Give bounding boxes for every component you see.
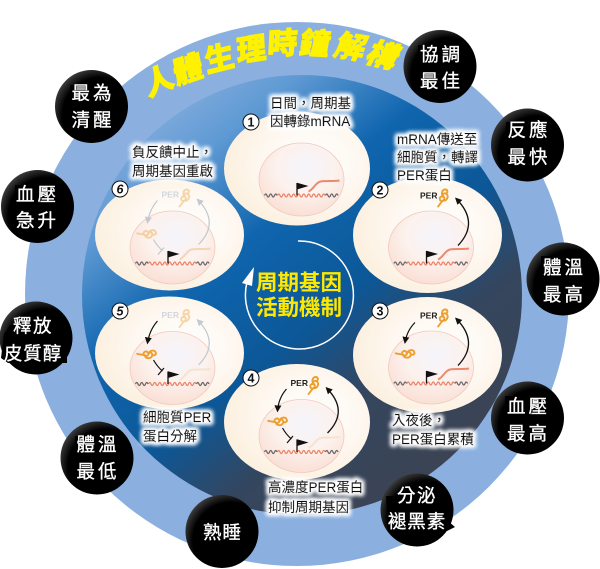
bubble: 最為清醒: 清醒 [71, 110, 115, 130]
inhibition bar [282, 428, 293, 443]
bubble: 血壓最高: 血壓 [507, 396, 550, 417]
title: 體 [169, 41, 206, 94]
faded import arrow [148, 200, 158, 222]
nuclear PER protein [268, 413, 288, 429]
cell 3: accumulation [353, 297, 502, 413]
badge 1 [243, 114, 259, 130]
faded PER label: PER [162, 310, 179, 320]
center heading: 活動機制 [256, 291, 342, 322]
cell 2: translation [353, 177, 502, 293]
caption 2: PER蛋白 [397, 168, 452, 183]
bubble: 體溫最低: 最低 [76, 461, 120, 482]
export arrow [326, 388, 338, 433]
bubble: 血壓急升: 血壓 [16, 184, 59, 205]
export arrow [456, 318, 469, 366]
badge 4: 4 [248, 372, 255, 386]
badge 5 [112, 303, 128, 319]
caption 2: mRNA傳送至 [397, 132, 477, 147]
bubble: 血壓最高: 最高 [507, 423, 550, 444]
faded export arrow [198, 200, 209, 244]
PER label: PER [290, 378, 308, 388]
bubble: 最為清醒: 最為 [71, 82, 115, 104]
bubble: 釋放皮質醇: 釋放 [13, 316, 53, 336]
badge 1: 1 [248, 116, 255, 130]
bubble: 體溫最低: 體溫 [76, 434, 120, 455]
caption 5: 細胞質PER [143, 410, 212, 425]
caption 6: 負反饋中止， [132, 145, 213, 160]
bubble: 分泌褪黑素 [380, 474, 455, 546]
bubble: 熟睡 [186, 495, 258, 568]
badge 4 [243, 370, 259, 386]
PER protein [438, 190, 448, 206]
center cycle arrow [242, 241, 353, 349]
badge 6 [112, 181, 128, 197]
PER label: PER [420, 190, 437, 200]
title: 解 [329, 22, 374, 68]
bubble: 反應最快: 最快 [507, 146, 551, 168]
badge 3: 3 [377, 304, 384, 318]
caption 1 [270, 95, 351, 129]
caption 6: 周期基因重啟 [132, 163, 213, 179]
badge 2: 2 [377, 184, 384, 198]
caption 1: 日間，周期基 [270, 95, 351, 111]
bubble: 最為清醒 [55, 70, 128, 143]
caption 2 [397, 132, 478, 183]
caption 3 [392, 413, 474, 447]
bubble: 分泌褪黑素: 分泌 [397, 485, 437, 506]
title: 時 [267, 18, 299, 64]
title: 鐘 [296, 19, 335, 64]
inhibition bar [154, 360, 164, 375]
caption 4: 高濃度PER蛋白 [268, 479, 363, 495]
badge 2 [372, 182, 388, 198]
caption 3: 入夜後， [392, 413, 446, 428]
cell 1: transcription [224, 112, 370, 226]
badge 5: 5 [117, 304, 125, 318]
bubble: 協調最佳 [404, 30, 476, 103]
faded nuclear PER protein [137, 225, 157, 242]
caption 1: 因轉錄mRNA [270, 114, 350, 129]
bubble: 血壓急升: 急升 [16, 210, 59, 231]
faded PER protein [180, 310, 189, 327]
mRNA strand [308, 180, 340, 192]
bubble: 反應最快 [491, 108, 564, 182]
bubble: 血壓急升 [1, 170, 74, 243]
caption 2: 細胞質，轉譯 [397, 150, 478, 165]
nuclear PER protein [137, 346, 157, 362]
title [140, 18, 410, 106]
bubble: 血壓最高 [491, 382, 564, 454]
bubble: 釋放皮質醇 [0, 302, 72, 374]
center heading: 周期基因 [256, 266, 342, 297]
import arrow [148, 321, 158, 343]
caption 4 [268, 479, 363, 515]
bubble: 體溫最高 [526, 242, 600, 316]
PER protein [438, 310, 448, 326]
caption 3: PER蛋白累積 [392, 432, 474, 447]
faded PER label: PER [162, 190, 179, 200]
bubble: 熟睡: 熟睡 [203, 522, 242, 543]
center heading [256, 266, 342, 322]
faded inhibition bar [154, 240, 164, 254]
cell 5: degradation [95, 296, 244, 410]
badge 3 [372, 303, 388, 319]
export arrow [456, 198, 469, 246]
PER label: PER [420, 310, 437, 320]
bubble: 體溫最高: 最高 [543, 284, 586, 305]
PER protein [308, 377, 318, 394]
bubble: 分泌褪黑素: 褪黑素 [388, 511, 446, 532]
bubble: 體溫最高: 體溫 [543, 257, 586, 278]
import arrow [405, 322, 415, 342]
title: 生 [202, 31, 237, 82]
faded PER protein [180, 190, 189, 206]
bubble: 體溫最低 [60, 422, 134, 494]
bubble: 協調最佳: 協調 [420, 44, 463, 65]
caption 5: 蛋白分解 [143, 429, 197, 444]
cell 6: restart [95, 180, 244, 290]
title: 理 [235, 23, 267, 71]
caption 4: 抑制周期基因 [268, 499, 349, 515]
caption 6 [132, 145, 213, 179]
badge 6: 6 [117, 182, 125, 196]
inner gradient disc [82, 75, 522, 515]
faded export arrow [198, 320, 209, 365]
bubble: 反應最快: 反應 [507, 120, 551, 140]
title: 人 [140, 51, 178, 106]
caption 5 [143, 410, 212, 444]
bubble: 釋放皮質醇: 皮質醇 [4, 343, 62, 364]
nuclear PER protein [396, 345, 415, 362]
title: 構 [359, 30, 410, 77]
cell 4: inhibition [224, 364, 370, 480]
bubble: 協調最佳: 最佳 [420, 70, 463, 92]
import arrow [278, 389, 286, 411]
